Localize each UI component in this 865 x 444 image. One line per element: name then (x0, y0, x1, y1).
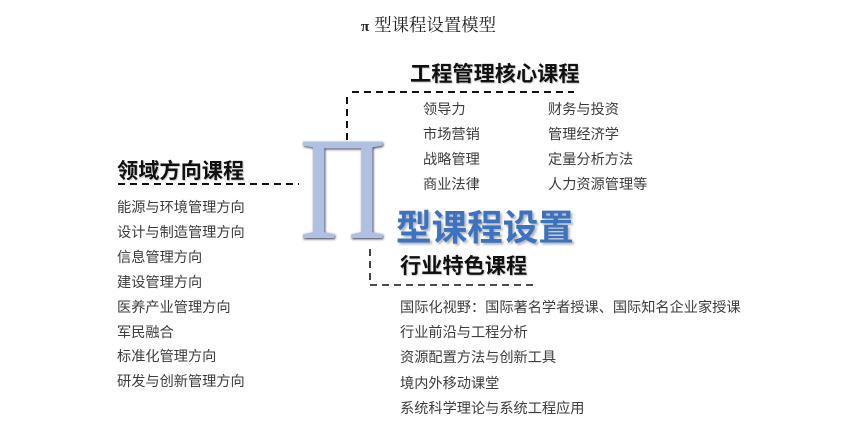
list: domain courses: 军民融合 (117, 325, 174, 341)
list: industry courses: 系统科学理论与系统工程应用 (400, 401, 584, 417)
list: core courses: 商业法律 (423, 177, 480, 193)
list: domain courses: 设计与制造管理方向 (117, 225, 245, 241)
list: domain courses: 医养产业管理方向 (117, 300, 231, 316)
list: core courses (423, 102, 647, 193)
list: domain courses: 研发与创新管理方向 (117, 374, 245, 390)
list: industry courses (400, 300, 741, 417)
list: core courses: 市场营销 (423, 127, 480, 143)
list: industry courses: 资源配置方法与创新工具 (400, 350, 556, 366)
list: industry courses: 国际化视野：国际著名学者授课、国际知名企业家授课 (400, 300, 741, 316)
list: core courses: 人力资源管理等 (548, 177, 647, 193)
list: core courses: 领导力 (423, 102, 466, 118)
subtitle: pi-shaped course setup: 型课程设置 (396, 208, 574, 248)
list: domain courses: 建设管理方向 (117, 275, 202, 291)
list: domain courses (117, 200, 245, 390)
heading: industry courses: 行业特色课程 (400, 255, 527, 278)
list: core courses: 财务与投资 (548, 102, 619, 118)
heading: domain courses: 领域方向课程 (117, 160, 244, 183)
list: core courses: 战略管理 (423, 152, 480, 168)
list: domain courses: 信息管理方向 (117, 250, 202, 266)
title: π 型课程设置模型 (361, 15, 496, 35)
list: domain courses: 标准化管理方向 (117, 349, 216, 365)
list: core courses: 管理经济学 (548, 127, 619, 143)
list: industry courses: 行业前沿与工程分析 (400, 325, 528, 341)
list: domain courses: 能源与环境管理方向 (117, 200, 245, 216)
list: industry courses: 境内外移动课堂 (400, 376, 499, 392)
list: core courses: 定量分析方法 (548, 152, 633, 168)
heading: core courses: 工程管理核心课程 (410, 63, 580, 86)
